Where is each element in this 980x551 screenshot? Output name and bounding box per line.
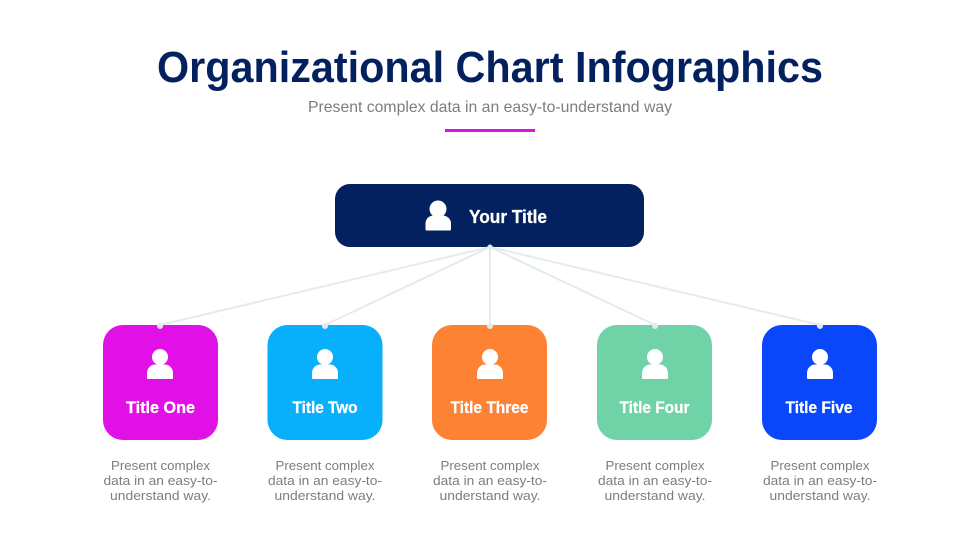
label: Title Four xyxy=(620,398,690,417)
label: Title Three xyxy=(450,398,528,417)
description: Title Four xyxy=(598,458,712,503)
top box: Your Title xyxy=(335,184,644,247)
description: Title One: Present complex xyxy=(111,458,211,473)
description: Title Five: understand way. xyxy=(770,488,870,503)
description: Title Two: understand way. xyxy=(274,488,376,503)
description: Title Two: Present complex xyxy=(276,458,375,473)
description: Title Four: data in an easy-to- xyxy=(598,473,712,488)
title: Organizational Chart Infographics xyxy=(157,43,823,92)
card: Title One xyxy=(103,325,218,440)
description: Title Three xyxy=(433,458,547,503)
description: Title Three: understand way. xyxy=(440,488,540,503)
description: Title One: understand way. xyxy=(110,488,211,503)
icon: person xyxy=(477,349,503,379)
icon: person xyxy=(807,349,833,379)
description: Title Five xyxy=(763,458,877,503)
card: Title Five xyxy=(762,325,877,440)
description: Title Two: data in an easy-to- xyxy=(268,473,382,488)
description: Title Three: Present complex xyxy=(440,458,540,473)
description: Title Five: data in an easy-to- xyxy=(763,473,877,488)
icon: person xyxy=(312,349,338,379)
description: Title Four: Present complex xyxy=(606,458,705,473)
card: Title Two xyxy=(268,325,382,440)
description: Title One xyxy=(104,458,218,503)
subtitle: Present complex data in an easy-to-understand way xyxy=(308,99,672,116)
label: Title Five xyxy=(786,398,852,417)
description: Title One: data in an easy-to- xyxy=(104,473,218,488)
label: Your Title xyxy=(469,206,547,227)
accent underline xyxy=(445,129,535,132)
description: Title Two xyxy=(268,458,382,503)
connector lines xyxy=(158,246,822,328)
description: Title Four: understand way. xyxy=(604,488,706,503)
label: Title One xyxy=(126,398,195,417)
description: Title Five: Present complex xyxy=(770,458,870,473)
label: Title Two xyxy=(292,398,358,417)
icon: person xyxy=(426,200,451,230)
description: Title Three: data in an easy-to- xyxy=(433,473,547,488)
icon: person xyxy=(642,349,668,379)
card: Title Three xyxy=(432,325,547,440)
card: Title Four xyxy=(597,325,712,440)
icon: person xyxy=(147,349,173,379)
